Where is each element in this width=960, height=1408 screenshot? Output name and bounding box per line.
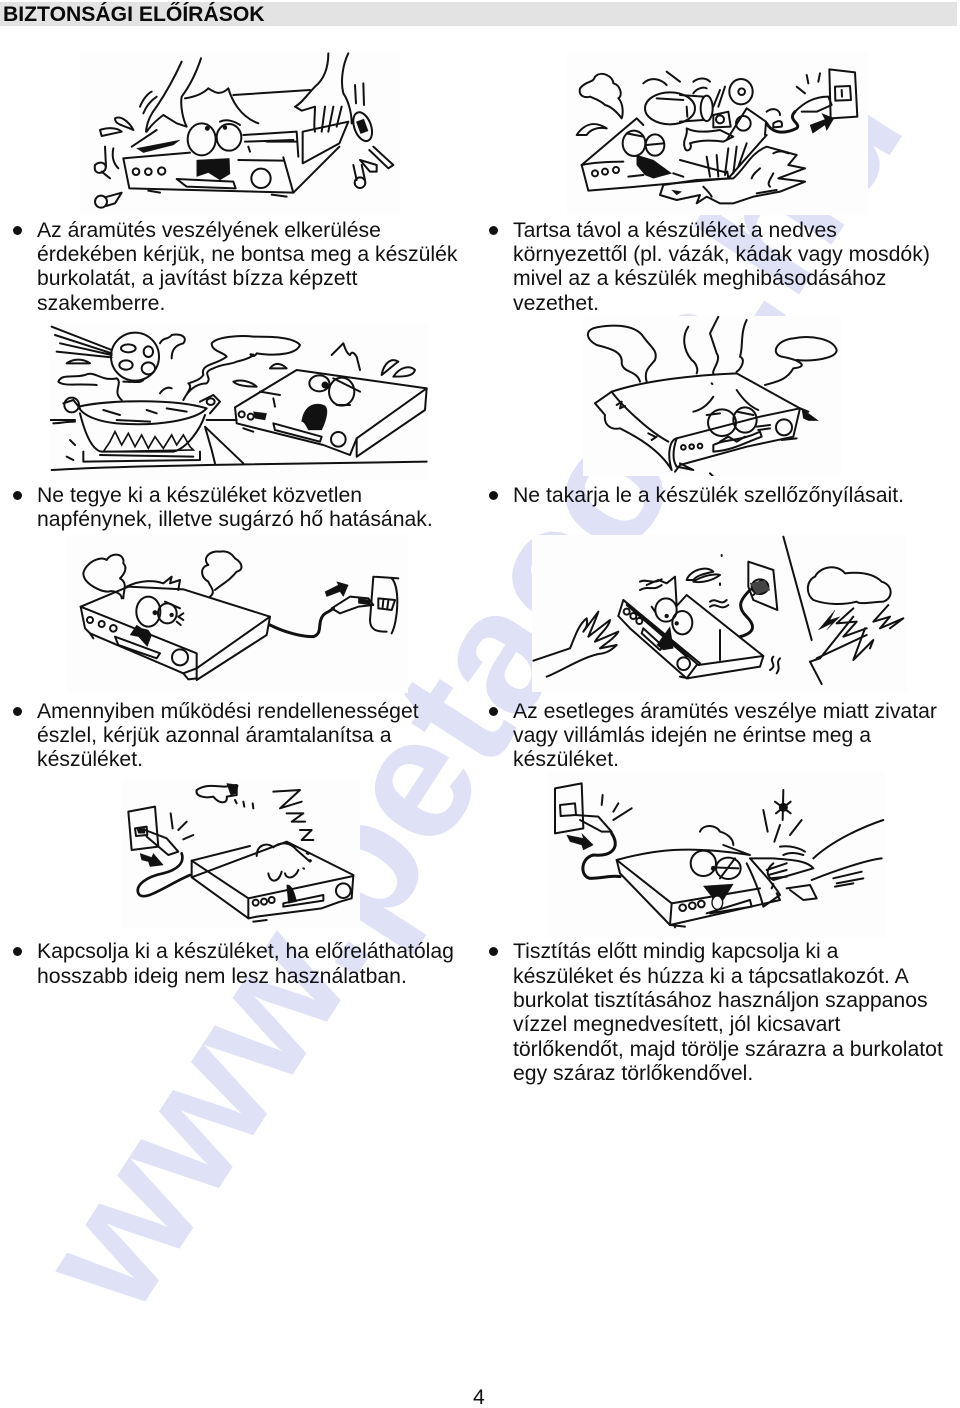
text: keep away from moisture: vezethet. xyxy=(513,292,599,315)
illustration: sun, burner, suffering device xyxy=(50,323,428,480)
text: cleaning xyxy=(513,940,943,1085)
text: unplug when unused xyxy=(37,940,454,988)
text: keep away from moisture: Tartsa távol a készüléket a nedves xyxy=(513,218,837,242)
text: keep away from moisture: mivel az a készülék meghibásodásához xyxy=(513,267,886,290)
text: keep away from moisture: környezettől (pl. vázák, kádak vagy mosdók) xyxy=(513,243,930,266)
text: keep away from moisture xyxy=(513,218,930,315)
text: lightning warning: Az esetleges áramütés veszélye miatt zivatar xyxy=(513,700,937,723)
illustration: hand, device, storm xyxy=(532,535,907,692)
panel: no direct sunlight xyxy=(13,326,433,531)
text: unplug when unused: hosszabb ideig nem lesz használatban. xyxy=(37,965,407,988)
illustration: covered device xyxy=(583,316,841,476)
bullet xyxy=(13,491,22,500)
watermark: www.petacom.hu xyxy=(0,40,939,1342)
text: do not open the casing: szakemberre. xyxy=(37,292,165,315)
panel: keep away from moisture xyxy=(489,68,930,315)
panel: do not cover vents xyxy=(489,316,904,507)
illustration: hands opening device xyxy=(80,52,400,215)
bullet xyxy=(489,226,498,235)
text: unplug on malfunction: észlel, kérjük azonnal áramtalanítsa a xyxy=(37,724,392,747)
title bar xyxy=(0,2,957,26)
panel: unplug on malfunction xyxy=(13,550,419,771)
text: cleaning: Tisztítás előtt mindig kapcsolja ki a xyxy=(513,940,838,963)
text: cleaning: vízzel megnedvesített, jól kicsavart xyxy=(513,1013,840,1036)
panel: cleaning xyxy=(489,782,943,1085)
panel: lightning warning xyxy=(489,535,937,771)
text: cleaning: burkolat tisztításához használjon szappanos xyxy=(513,989,928,1012)
bullet xyxy=(13,707,22,716)
panel: unplug when unused xyxy=(13,783,454,988)
text: do not open the casing: érdekében kérjük, ne bontsa meg a készülék xyxy=(37,243,457,266)
text: do not cover vents: Ne takarja le a készülék szellőzőnyílásait. xyxy=(513,484,904,507)
bullet xyxy=(489,491,498,500)
text: cleaning: egy száraz törlőkendővel. xyxy=(513,1062,753,1085)
text: cleaning: törlőkendőt, majd törölje szárazra a burkolatot xyxy=(513,1038,943,1061)
text: lightning warning xyxy=(513,700,937,771)
bullet xyxy=(489,707,498,716)
text: do not open the casing: burkolatát, a javítást bízza képzett xyxy=(37,267,357,290)
illustration: vase spilling on device xyxy=(567,52,868,215)
text: do not open the casing xyxy=(37,218,458,315)
bullet xyxy=(489,947,498,956)
illustration: sleeping device xyxy=(122,780,360,928)
bullet xyxy=(13,226,22,235)
text: no direct sunlight xyxy=(37,484,433,531)
text: unplug on malfunction: Amennyiben működési rendellenességet xyxy=(37,700,419,723)
text: no direct sunlight: Ne tegye ki a készüléket közvetlen xyxy=(37,484,362,507)
title bar: BIZTONSÁGI ELŐÍRÁSOK xyxy=(3,3,265,26)
text: unplug on malfunction: készüléket. xyxy=(37,748,143,771)
text: unplug when unused: Kapcsolja ki a készüléket, ha előreláthatólag xyxy=(37,940,454,963)
text: no direct sunlight: napfénynek, illetve sugárzó hő hatásának. xyxy=(37,508,433,531)
text: cleaning: készüléket és húzza ki a tápcsatlakozót. A xyxy=(513,965,909,988)
text: lightning warning: készüléket. xyxy=(513,748,619,771)
text: do not open the casing: Az áramütés veszélyének elkerülése xyxy=(37,218,381,242)
text: unplug on malfunction xyxy=(37,700,419,771)
bullet xyxy=(13,947,22,956)
panel: do not open the casing xyxy=(13,52,458,315)
illustration: wiping device with cloth xyxy=(548,773,885,938)
illustration: smoking device unplugged xyxy=(67,535,408,693)
text: lightning warning: vagy villámlás idején ne érintse meg a xyxy=(513,724,871,747)
